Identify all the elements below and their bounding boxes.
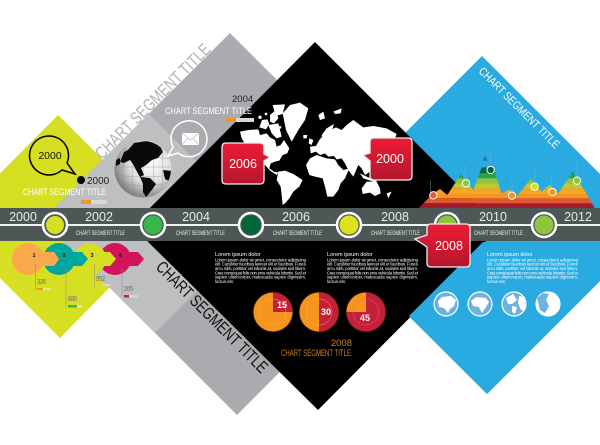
timeline segment titles: CHART SEGMENT TITLE bbox=[371, 230, 420, 237]
chart: pie 45: 45 bbox=[360, 313, 370, 323]
chart: mountain chart bbox=[410, 153, 600, 208]
text block: 2008 orange caption bbox=[281, 338, 352, 358]
timeline bar bbox=[0, 208, 600, 241]
chart: numbered arrow process bbox=[12, 243, 144, 308]
timeline segment titles: CHART SEGMENT TITLE bbox=[474, 230, 523, 237]
text block: black panel left paragraph: arcu nibh, porttitor vel lobortis at, sodales sed libero. bbox=[215, 266, 306, 271]
icon: black and white globe bbox=[114, 140, 172, 198]
text block: black panel right paragraph: luctus est. bbox=[327, 279, 346, 284]
panel: blue lower section bbox=[409, 242, 600, 394]
text block: blue panel paragraph: arcu nibh, porttitor vel lobortis at, sodales sed libero. bbox=[487, 266, 578, 271]
text block: black panel right paragraph: arcu nibh, porttitor vel lobortis at, sodales sed libero. bbox=[327, 266, 418, 271]
callout: 2000 red box bbox=[363, 138, 412, 180]
text block: blue panel paragraph: luctus est. bbox=[487, 279, 506, 284]
chart: pie 15 bbox=[252, 292, 294, 332]
text block: black panel right paragraph: Lorem ipsum dolor sit amet, consectetur adipiscing bbox=[327, 258, 419, 262]
callout: 2006 red box: 2006 bbox=[229, 157, 257, 171]
timeline year labels: 2010 bbox=[479, 210, 507, 224]
text block: blue panel paragraph bbox=[487, 252, 579, 284]
text block: lime panel year and title: CHART SEGMENT TITLE bbox=[23, 187, 106, 198]
icon: envelope speech bubble bbox=[168, 121, 207, 157]
panel: gray diamond bbox=[42, 33, 424, 415]
icon: small globe 3 bbox=[502, 292, 526, 316]
timeline nodes bbox=[43, 213, 556, 237]
chart: pie 30: 30 bbox=[321, 307, 331, 317]
text block: gray panel year and title: CHART SEGMENT TITLE bbox=[165, 106, 252, 117]
text block: 2008 orange caption: CHART SEGMENT TITLE bbox=[281, 348, 351, 358]
timeline year labels: 2012 bbox=[564, 210, 592, 224]
text block: black panel right paragraph: elit. Curabitur faucibus laoreet elit et faucibus. Fusce bbox=[327, 262, 419, 267]
icon: small globe 4 bbox=[536, 292, 560, 316]
timeline segment titles: CHART SEGMENT TITLE bbox=[76, 230, 125, 237]
text block: blue panel paragraph: sapien ullamcorper, malesuada sapien dignissim, bbox=[487, 275, 578, 280]
heading: gray diamond rotated title: CHART SEGMENT TITLE bbox=[91, 40, 214, 163]
text block: black panel left paragraph: Lorem ipsum dolor bbox=[215, 252, 261, 258]
icon: small globe 1 bbox=[434, 292, 458, 316]
text block: lime panel year and title: 2000 bbox=[87, 176, 110, 187]
chart: numbered arrow process: 2 bbox=[62, 253, 66, 259]
process values: 265 bbox=[124, 284, 133, 293]
timeline segment titles bbox=[76, 230, 523, 237]
text block: gray panel year and title bbox=[165, 94, 254, 122]
chart markers bbox=[430, 153, 581, 199]
panel: blue diamond bbox=[315, 56, 600, 394]
text block: black panel left paragraph: Lorem ipsum dolor sit amet, consectetur adipiscing bbox=[215, 258, 307, 262]
timeline segment titles: CHART SEGMENT TITLE bbox=[273, 230, 322, 237]
text block: lime panel year and title bbox=[23, 176, 110, 204]
timeline year labels: 2002 bbox=[85, 210, 113, 224]
text block: blue panel paragraph: Cras consequat felis non eros vehicula lobortis. Sed et bbox=[487, 270, 579, 276]
icon: small globe 2 bbox=[468, 292, 492, 316]
timeline segment titles: CHART SEGMENT TITLE bbox=[176, 230, 225, 237]
callout: 2008 red box bbox=[415, 224, 470, 267]
process values bbox=[37, 274, 138, 308]
text block: black panel left paragraph: luctus est. bbox=[215, 279, 234, 284]
panel: lime diamond bbox=[0, 115, 170, 338]
chart: numbered arrow process: 4 bbox=[118, 253, 122, 259]
chart: numbered arrow process: 1 bbox=[32, 253, 36, 259]
timeline year labels bbox=[9, 210, 592, 224]
timeline year labels: 2008 bbox=[381, 210, 409, 224]
text block: blue panel paragraph: Lorem ipsum dolor sit amet, consectetur adipiscing bbox=[487, 258, 579, 262]
chart: world map bbox=[240, 103, 397, 205]
text block: black panel right paragraph: Cras consequat felis non eros vehicula lobortis. Sed et bbox=[327, 270, 419, 276]
text block: black panel left paragraph bbox=[215, 252, 307, 284]
text block: black panel right paragraph: sapien ullamcorper, malesuada sapien dignissim, bbox=[327, 275, 418, 280]
chart: pie 45 bbox=[346, 292, 386, 332]
process values: 952 bbox=[96, 274, 105, 283]
process values: 680 bbox=[68, 294, 77, 303]
timeline year labels: 2006 bbox=[282, 210, 310, 224]
timeline year labels: 2004 bbox=[182, 210, 210, 224]
panel: black diamond bbox=[132, 42, 500, 410]
heading: blue rotated title: CHART SEGMENT TITLE bbox=[476, 66, 562, 151]
text block: black panel left paragraph: Cras consequat felis non eros vehicula lobortis. Sed et bbox=[215, 270, 307, 276]
text block: blue panel paragraph: Lorem ipsum dolor bbox=[487, 252, 533, 258]
callout: 2008 red box: 2008 bbox=[435, 239, 463, 253]
text block: gray panel year and title: 2004 bbox=[232, 94, 253, 105]
callout: 2000 speech bubble in lime panel bbox=[30, 136, 75, 175]
text block: 2008 orange caption: 2008 bbox=[331, 338, 352, 349]
heading: lower gray rotated title: CHART SEGMENT TITLE bbox=[152, 257, 272, 377]
text block: black panel left paragraph: elit. Curabitur faucibus laoreet elit et faucibus. Fusce bbox=[215, 262, 307, 267]
process values: 335 bbox=[37, 277, 46, 286]
callout: 2000 red box: 2000 bbox=[376, 152, 404, 166]
chart: pie 30 bbox=[298, 292, 340, 332]
callout: 2006 red box bbox=[222, 143, 270, 184]
chart: numbered arrow process: 3 bbox=[90, 253, 94, 259]
chart: pie 15: 15 bbox=[277, 300, 287, 310]
callout: 2000 speech bubble in lime panel: 2000 bbox=[38, 150, 62, 162]
text block: black panel left paragraph: sapien ullamcorper, malesuada sapien dignissim, bbox=[215, 275, 306, 280]
text block: blue panel paragraph: elit. Curabitur faucibus laoreet elit et faucibus. Fusce bbox=[487, 262, 579, 267]
text block: black panel right paragraph bbox=[327, 252, 419, 284]
text block: black panel right paragraph: Lorem ipsum dolor bbox=[327, 252, 373, 258]
timeline year labels: 2000 bbox=[9, 210, 37, 224]
